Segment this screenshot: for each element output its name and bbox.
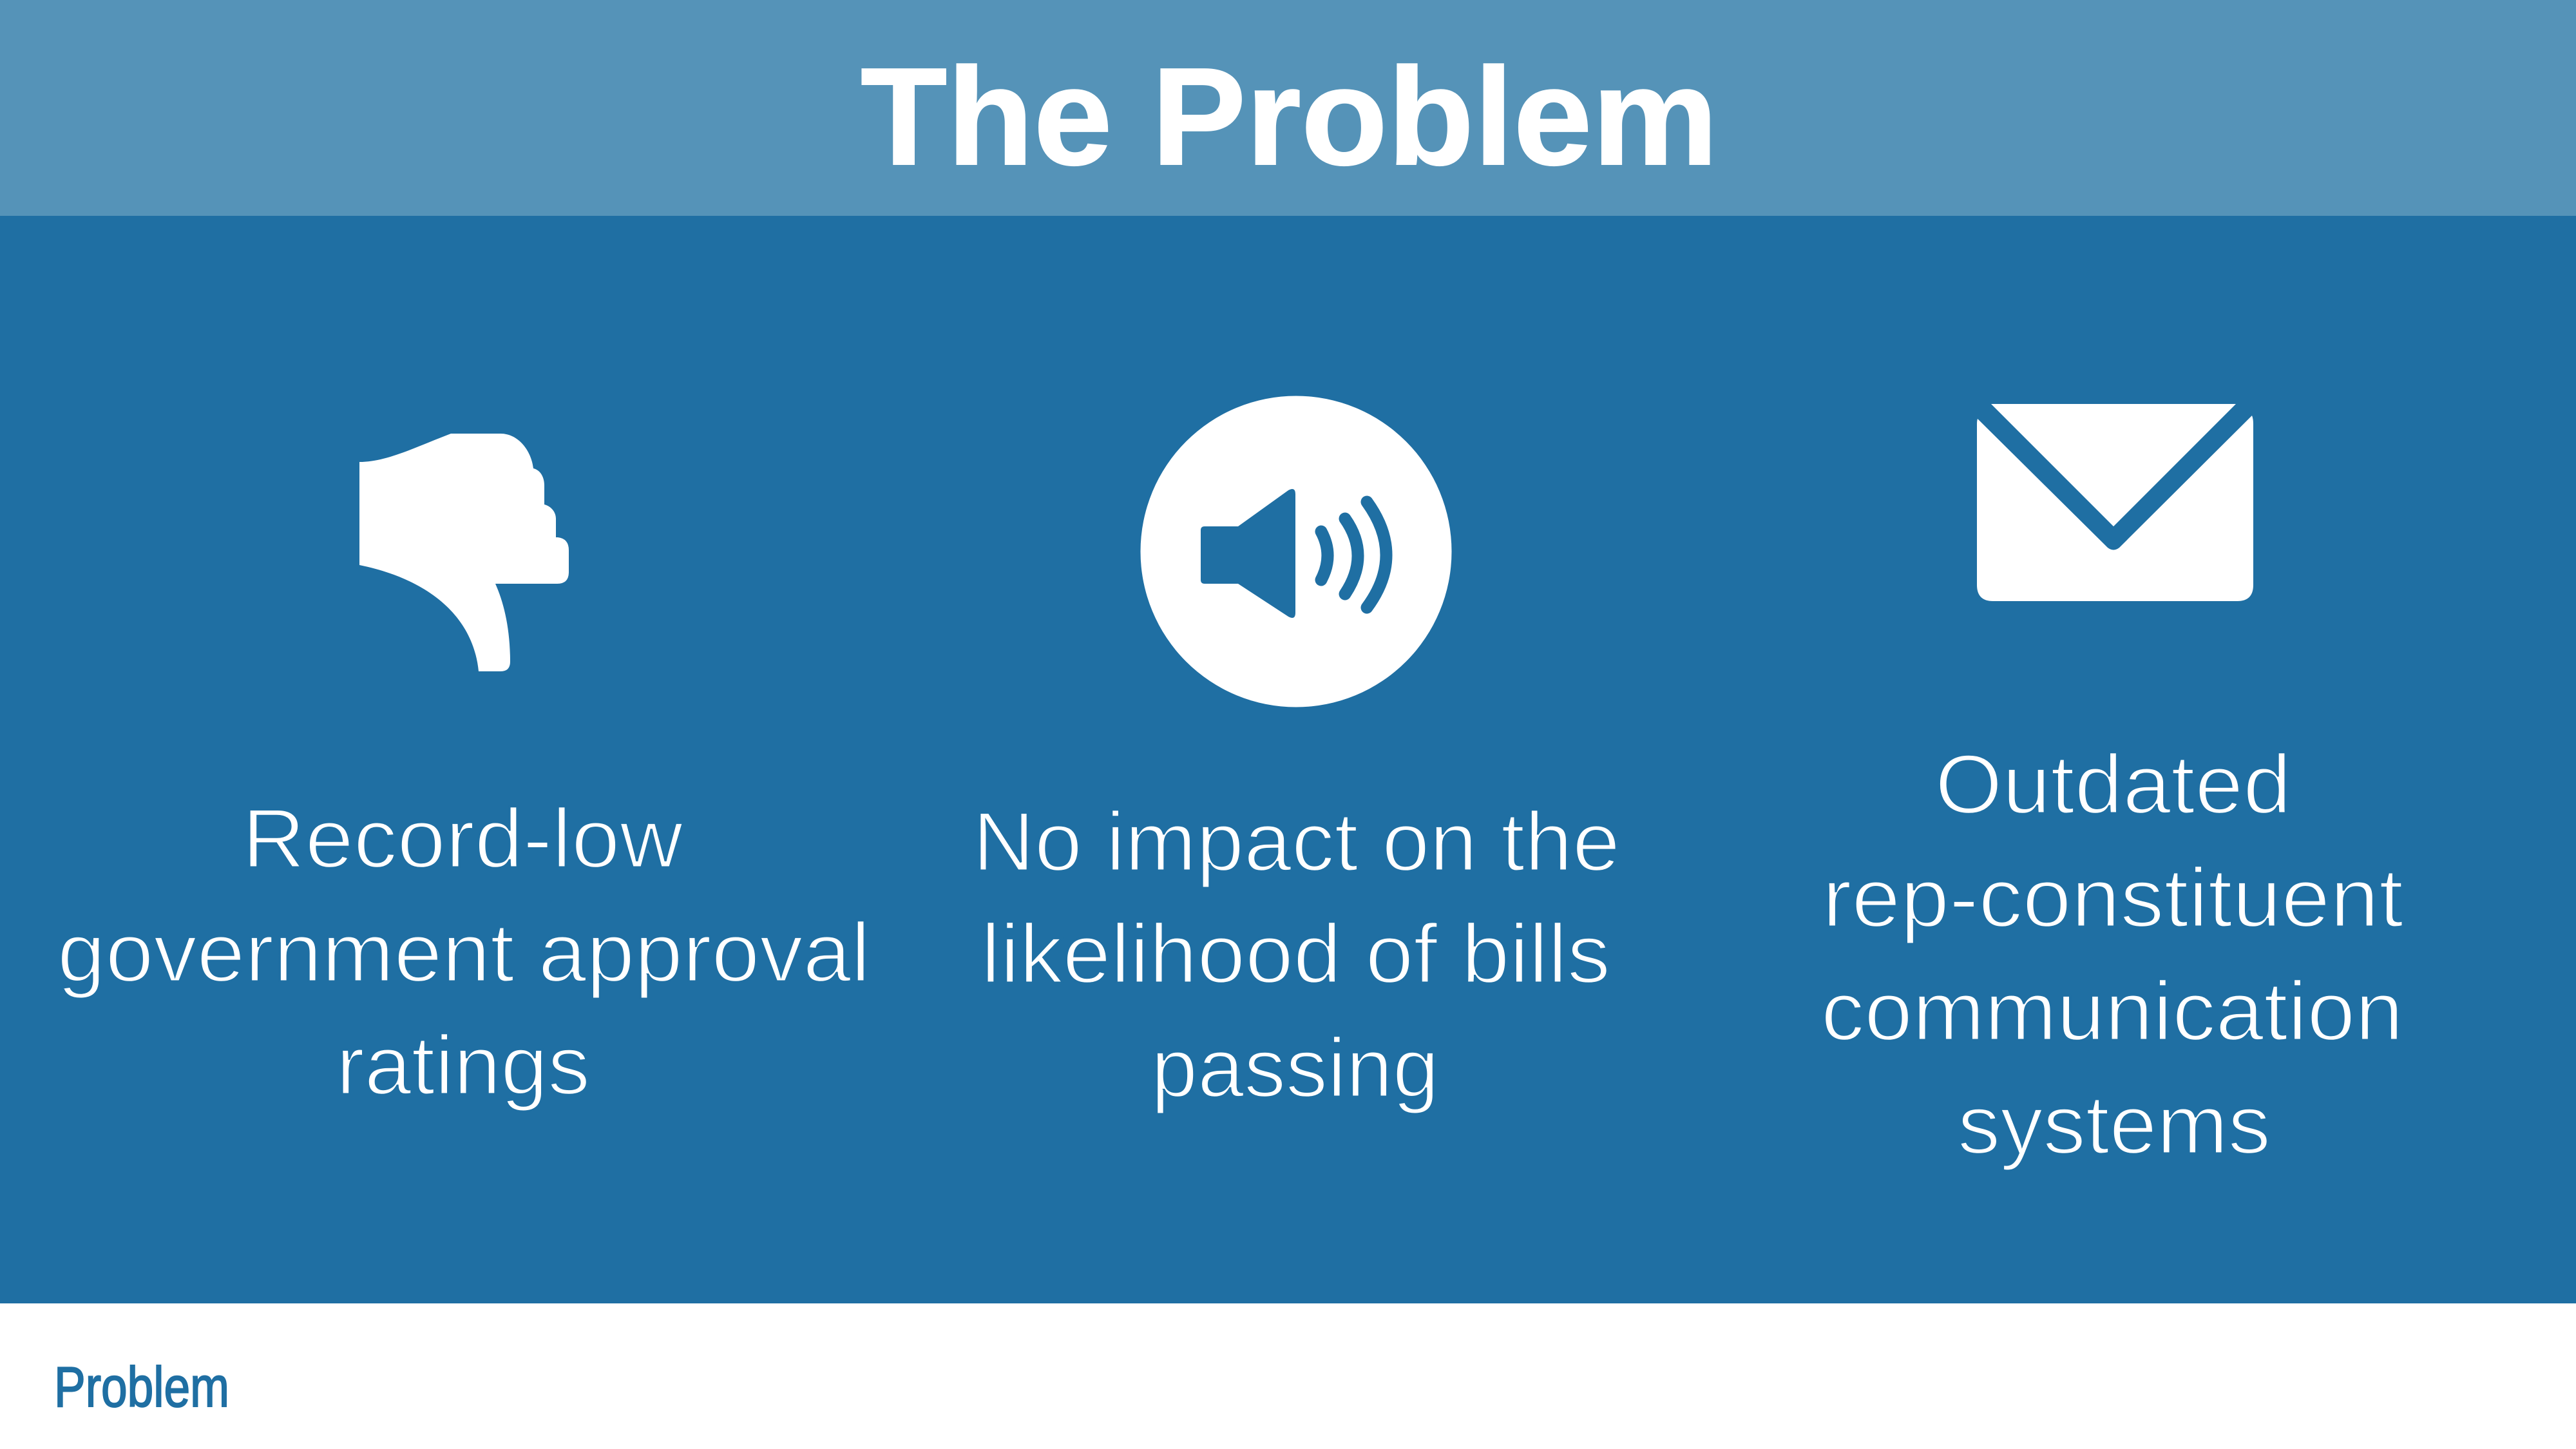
icon: speaker in circle: [1140, 396, 1452, 707]
text block: approval ratings: government approval: [57, 905, 870, 999]
footer label: Problem: [54, 1355, 229, 1419]
text block: communication systems: systems: [1958, 1077, 2271, 1171]
text block: impact on bills: likelihood of bills: [981, 907, 1610, 1001]
text block: communication systems: rep-constituent: [1822, 850, 2403, 945]
text block: communication systems: [1821, 737, 2403, 1171]
text block: communication systems: communication: [1821, 964, 2403, 1058]
icon: thumbs down: [359, 434, 569, 671]
text block: impact on bills: No impact on the: [973, 794, 1620, 888]
title: The Problem: [861, 39, 1718, 194]
text block: approval ratings: Record-low: [242, 791, 683, 885]
icon: envelope: [1977, 404, 2253, 601]
text block: approval ratings: [57, 791, 870, 1112]
text block: approval ratings: ratings: [336, 1018, 590, 1112]
panel: header band: [0, 0, 2576, 216]
panel: main blue background: [0, 216, 2576, 1303]
text block: communication systems: Outdated: [1935, 737, 2291, 831]
text block: impact on bills: passing: [1151, 1021, 1439, 1115]
text block: impact on bills: [973, 794, 1620, 1115]
